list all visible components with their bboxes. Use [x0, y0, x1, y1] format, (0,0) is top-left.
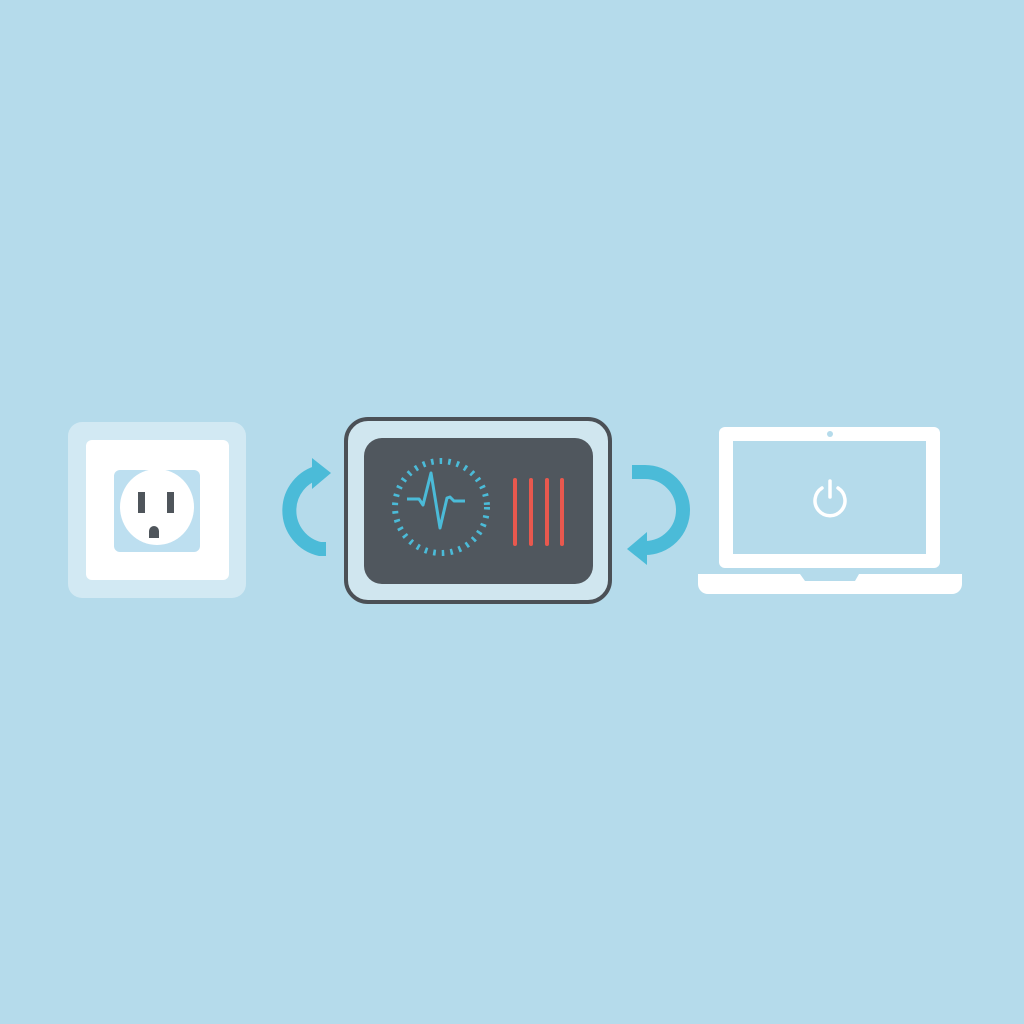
icon: dashed gauge with pulse	[395, 461, 487, 553]
icon: red bars	[513, 478, 564, 546]
icon: power outlet	[68, 422, 246, 598]
arrow: left cycle arrow	[289, 458, 331, 549]
icon: laptop	[698, 427, 962, 594]
icon: power symbol	[815, 481, 845, 516]
panel: monitoring device	[346, 419, 610, 602]
arrow: right cycle arrow	[627, 472, 683, 565]
